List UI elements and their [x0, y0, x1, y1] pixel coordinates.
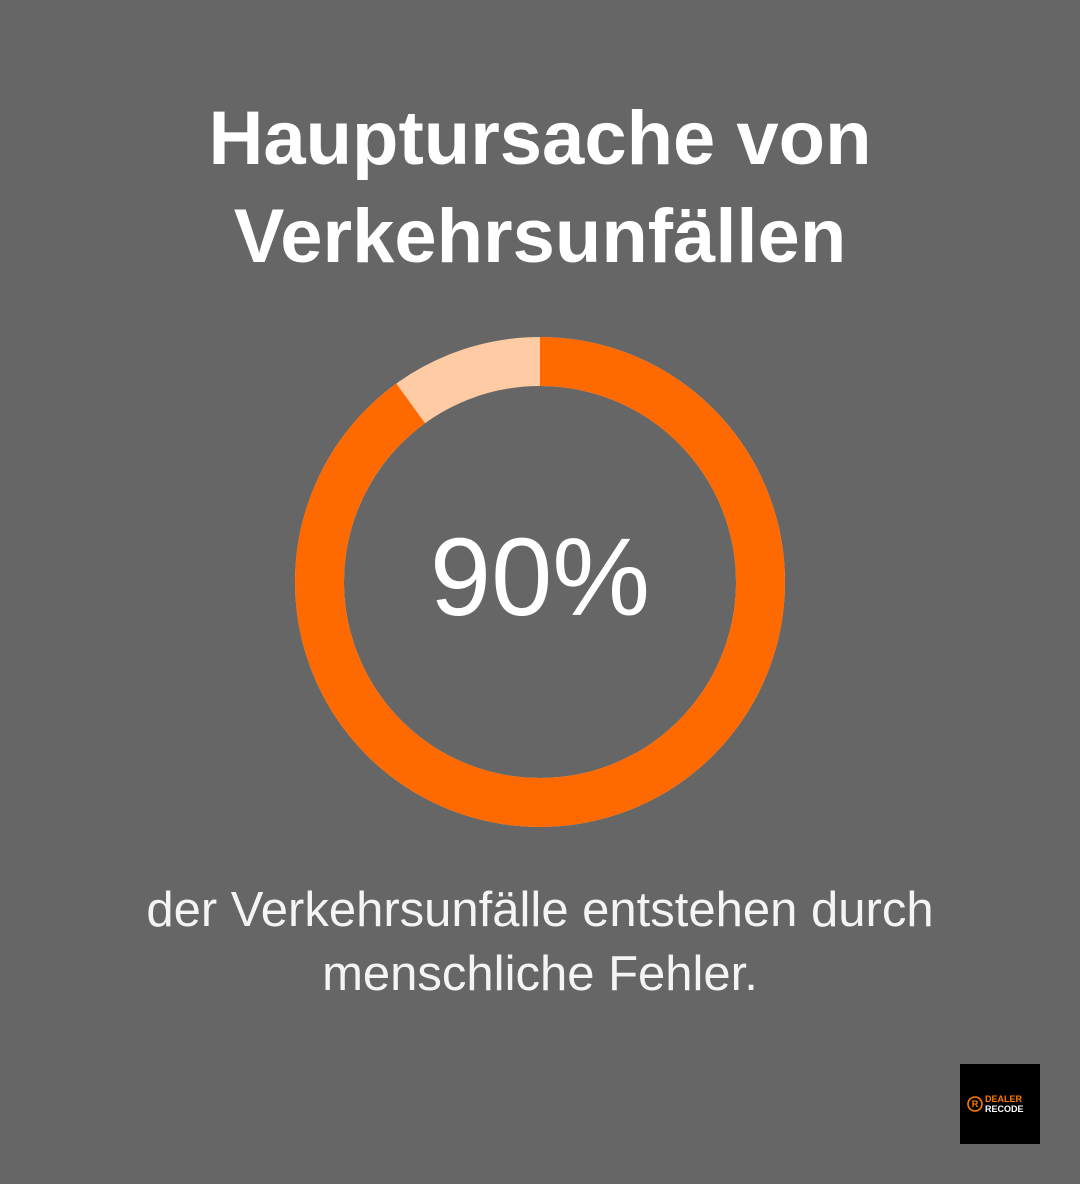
logo: DEALER — [985, 1094, 1023, 1104]
logo — [960, 1064, 1040, 1144]
logo: R — [972, 1099, 979, 1109]
logo: RECODE — [985, 1104, 1024, 1114]
description — [146, 883, 934, 1001]
description: menschliche Fehler. — [322, 947, 758, 1001]
title — [208, 96, 872, 279]
percentage: 90% — [430, 516, 650, 639]
title: Verkehrsunfällen — [234, 194, 846, 279]
title: Hauptursache von — [208, 96, 872, 181]
description: der Verkehrsunfälle entstehen durch — [146, 883, 934, 937]
